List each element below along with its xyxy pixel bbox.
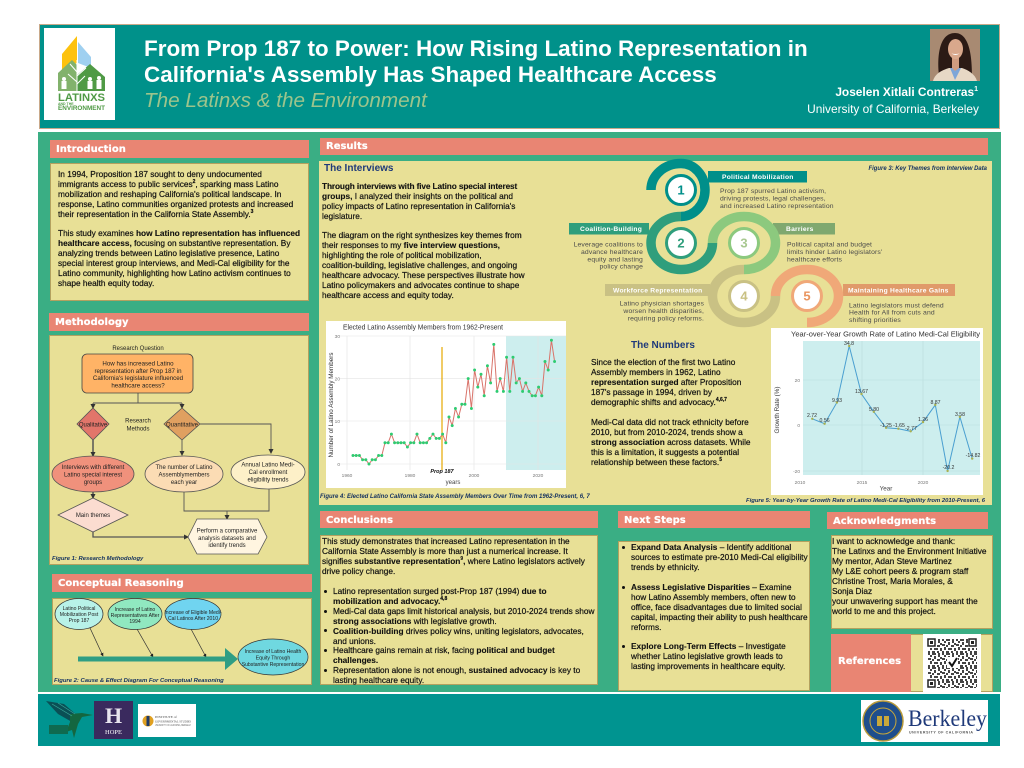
chart: elected Latino assembly members: Elected Latino Assembly Members from 1962-Present bbox=[343, 324, 503, 332]
conclusions bullets: mobilization and advocacy.4,8 bbox=[333, 596, 447, 606]
panel: methodology flowchart: Qualitative bbox=[79, 422, 108, 428]
banner: coalition-building: policy change bbox=[599, 264, 643, 270]
panel: cause and effect diagram: Increase of Eligible Medi- bbox=[164, 610, 222, 616]
Medi-Cal text bbox=[591, 417, 751, 467]
panel: cause and effect diagram: Substantive Representation bbox=[242, 662, 304, 668]
introduction text bbox=[58, 169, 293, 219]
chart: Medi-Cal eligibility growth: -14.82 bbox=[966, 453, 980, 459]
banner: coalition-building: advance healthcare bbox=[581, 249, 643, 256]
panel: methodology flowchart: Research bbox=[125, 418, 151, 424]
acknowledgments text: Sonja Diaz bbox=[832, 586, 872, 596]
banner: workforce representation: Workforce Representation bbox=[613, 288, 702, 294]
introduction study text: This study examines how Latino representation has influenced bbox=[58, 228, 300, 238]
panel: methodology flowchart: representation after Prop 187 in bbox=[94, 368, 182, 375]
interviews diagram description: The diagram on the right synthesizes key themes from bbox=[322, 230, 522, 240]
footer band bbox=[38, 694, 1000, 746]
Medi-Cal text: relationship between these factors.5 bbox=[591, 457, 722, 467]
chart: Medi-Cal eligibility growth: 2020 bbox=[918, 480, 929, 486]
banner: political mobilization: driving protests, legal challenges, bbox=[720, 196, 826, 202]
panel: methodology flowchart: each year bbox=[171, 480, 197, 486]
interviews text bbox=[322, 181, 518, 221]
panel: methodology flowchart: analysis datasets and bbox=[198, 536, 256, 542]
heading: Methodology: Methodology bbox=[55, 317, 129, 328]
acknowledgments text: My mentor, Adan Steve Martinez bbox=[832, 556, 952, 566]
main green background bbox=[38, 132, 1001, 692]
introduction study text: healthcare access, focusing on substantive representation. By bbox=[58, 238, 290, 248]
banner: coalition-building: Leverage coalitions to bbox=[574, 242, 643, 248]
panel: methodology flowchart: The number of Latino bbox=[155, 465, 213, 471]
heading: Conceptual Reasoning: Conceptual Reasoning bbox=[58, 578, 184, 589]
acknowledgments text: I want to acknowledge and thank: bbox=[832, 536, 955, 546]
introduction text: In 1994, Proposition 187 sought to deny undocumented bbox=[58, 169, 262, 179]
conclusions bullets: strong associations with legislative growth. bbox=[333, 616, 497, 626]
conclusions bullets: challenges. bbox=[333, 655, 378, 665]
heading: Next Steps: Next Steps bbox=[624, 515, 686, 526]
Medi-Cal text: this is a limitation, it suggests a potential bbox=[591, 447, 739, 457]
conclusions intro text: California State Assembly is more than just a numerical increase. It bbox=[322, 546, 568, 556]
panel: methodology flowchart: Interviews with different bbox=[62, 465, 125, 471]
logo: Institute of Governmental Studies: INSTITUTE of bbox=[155, 715, 178, 719]
icon: references QR code bbox=[923, 634, 981, 692]
interviews diagram description bbox=[322, 230, 525, 300]
conclusions bullets: lasting healthcare equity. bbox=[333, 675, 424, 685]
acknowledgments text: Christine Trost, Maria Morales, & bbox=[832, 576, 953, 586]
next steps bullets: office, face disadvantages due to limited social bbox=[631, 602, 802, 612]
introduction text: immigrants access to public services2, sparking mass Latino bbox=[58, 179, 278, 189]
introduction study text: special interest group interviews, and Medi-Cal eligibility for the bbox=[58, 258, 290, 268]
panel: methodology flowchart bbox=[49, 335, 309, 565]
panel: cause and effect diagram: Representatives After bbox=[111, 613, 160, 619]
logo: HOPE: H bbox=[105, 703, 122, 728]
chart: elected Latino assembly members bbox=[326, 321, 566, 488]
title: California's Assembly Has Shaped Healthcare Access bbox=[144, 62, 717, 87]
introduction study text: Latino community, highlighting how Latino activism continues to bbox=[58, 268, 291, 278]
numbered circles: 2 bbox=[677, 236, 685, 250]
interviews text: legislature. bbox=[322, 211, 362, 221]
banner: political mobilization bbox=[708, 171, 834, 210]
chart: Medi-Cal eligibility growth bbox=[771, 328, 983, 495]
panel: cause and effect diagram: Cal Latinos After 2010 bbox=[168, 616, 218, 622]
chart: elected Latino assembly members: Prop 187 bbox=[430, 469, 455, 475]
heading: Conceptual Reasoning bbox=[52, 574, 312, 592]
panel: methodology flowchart: Methods bbox=[126, 426, 150, 432]
panel: conclusions bbox=[320, 535, 598, 685]
next steps bullets: Explore Long-Term Effects – Investigate bbox=[631, 641, 786, 651]
title: From Prop 187 to Power: How Rising Latino Representation in bbox=[144, 36, 808, 61]
heading: Introduction bbox=[50, 140, 309, 158]
next steps bullets: lasting improvements in healthcare equity. bbox=[631, 661, 785, 671]
panel: introduction bbox=[50, 163, 309, 301]
numbers text: Since the election of the first two Latino bbox=[591, 357, 735, 367]
chart: Medi-Cal eligibility growth: -1.25 bbox=[880, 423, 892, 429]
banner: maintaining healthcare gains: shifting priorities bbox=[849, 317, 901, 324]
next steps bullets: Expand Data Analysis – Identify additional bbox=[631, 542, 791, 552]
chart: Medi-Cal eligibility growth: Year-over-Year Growth Rate of Latino Medi-Cal Eligibility bbox=[791, 330, 980, 338]
chart: Medi-Cal eligibility growth: 0 bbox=[797, 423, 800, 429]
interviews diagram description: Latino policymakers and advocates continue to shape bbox=[322, 280, 519, 290]
panel: cause and effect diagram: Increase of Latino bbox=[115, 607, 155, 613]
next steps bullets: trends by ethnicity. bbox=[631, 562, 700, 572]
chart: Medi-Cal eligibility growth: -1.65 bbox=[893, 423, 905, 429]
numbered circles: 4 bbox=[740, 288, 748, 304]
next steps bullets: sources to estimate pre-2010 Medi-Cal eligibility bbox=[631, 552, 808, 562]
logo: hummingbird bbox=[46, 701, 92, 738]
numbers text: Assembly members in 1962, Latino bbox=[591, 367, 721, 377]
Medi-Cal text: 2010, but from 2010-2024, trends show a bbox=[591, 427, 743, 437]
introduction text: their representation in the California State Assembly.3 bbox=[58, 209, 253, 219]
acknowledgments text: My L&E cohort peers & program staff bbox=[832, 566, 968, 576]
introduction text: response, Latino communities organized protests and increased bbox=[58, 199, 293, 209]
diagram: five key themes bbox=[569, 158, 955, 328]
numbered circles: 1 bbox=[677, 182, 685, 198]
conclusions bullets: Medi-Cal data gaps limit historical analysis, but 2010-2024 trends show bbox=[333, 606, 594, 616]
caption: figure 1: Figure 1: Research Methodology bbox=[52, 556, 143, 562]
header banner bbox=[39, 24, 1000, 129]
panel: methodology flowchart: Perform a comparative bbox=[197, 528, 258, 534]
banner: political mobilization: and increased Latino representation bbox=[720, 203, 834, 210]
chart: Medi-Cal eligibility growth: 5.80 bbox=[869, 407, 879, 413]
chart: elected Latino assembly members: 2020 bbox=[533, 473, 544, 479]
caption: figure 4: Figure 4: Elected Latino California State Assembly Members Over Time from 1962-Present, 6, 7 bbox=[320, 494, 590, 500]
logo: Institute of Governmental Studies bbox=[138, 704, 196, 737]
heading: Acknowledgments: Acknowledgments bbox=[833, 516, 936, 527]
banner: coalition-building bbox=[569, 223, 649, 270]
subtitle: The Latinxs & the Environment bbox=[144, 89, 427, 112]
heading: Introduction: Introduction bbox=[56, 144, 126, 155]
panel: methodology flowchart: healthcare access? bbox=[111, 382, 165, 390]
heading: Results bbox=[320, 138, 988, 155]
panel: next steps bbox=[618, 541, 810, 691]
conclusions bullets: and unions. bbox=[333, 636, 376, 646]
acknowledgments text: The Latinxs and the Environment Initiative bbox=[832, 546, 987, 556]
chart: elected Latino assembly members: years bbox=[446, 480, 460, 486]
chart: elected Latino assembly members: 0 bbox=[337, 462, 340, 468]
panel: methodology flowchart: eligibility trends bbox=[247, 478, 289, 484]
chart: Medi-Cal eligibility growth: -2.77 bbox=[905, 426, 917, 432]
banner: workforce representation: Latino physician shortages bbox=[620, 300, 704, 308]
next steps bullets: how Latino Assembly members, often new to bbox=[631, 592, 796, 602]
chart: Medi-Cal eligibility growth: 8.87 bbox=[930, 400, 941, 406]
interviews text: groups, I analyzed their insights on the political and bbox=[322, 191, 513, 201]
title bbox=[144, 36, 808, 87]
numbers text: 187's passage in 1994, driven by bbox=[591, 387, 712, 397]
next steps bullets: whether Latino legislative growth leads to bbox=[631, 651, 783, 661]
author photo bbox=[930, 29, 980, 81]
banner: political mobilization: Political Mobilization bbox=[722, 174, 794, 181]
panel: cause and effect diagram: Prop 187 bbox=[69, 618, 89, 624]
banner: barriers: Political capital and budget bbox=[787, 242, 872, 248]
subheading: The Interviews: The Interviews bbox=[324, 163, 393, 174]
references label bbox=[831, 634, 911, 692]
next steps bullets: reforms. bbox=[631, 622, 661, 632]
interviews diagram description: coalition-building, legislative challenges, and ongoing bbox=[322, 260, 517, 270]
spiral ribbons bbox=[651, 164, 838, 322]
banner: barriers: healthcare efforts bbox=[787, 256, 843, 264]
next steps bullets: Assess Legislative Disparities – Examine bbox=[631, 582, 792, 592]
panel: cause and effect diagram bbox=[52, 598, 312, 685]
panel: methodology flowchart: Cal enrollment bbox=[249, 470, 288, 476]
chart: elected Latino assembly members: Number of Latino Assembly Members bbox=[328, 352, 335, 458]
conclusions intro text: signifies substantive representation9, where Latino legislators actively bbox=[322, 556, 585, 566]
chart: Medi-Cal eligibility growth: Growth Rate (%) bbox=[774, 387, 781, 433]
next steps bullets bbox=[622, 542, 808, 671]
heading: Acknowledgments bbox=[827, 512, 988, 529]
panel: methodology flowchart: identify trends bbox=[208, 543, 246, 549]
numbered circles bbox=[666, 176, 822, 310]
banner: workforce representation: requiring policy reforms. bbox=[628, 316, 704, 322]
panel: cause and effect diagram: 1994 bbox=[129, 619, 141, 625]
panel: references bbox=[831, 634, 993, 692]
chart: Medi-Cal eligibility growth: 2010 bbox=[795, 480, 806, 486]
chart: elected Latino assembly members: 2000 bbox=[469, 473, 480, 479]
conclusions bullets: Coalition-building drives policy wins, uniting legislators, advocates, bbox=[333, 626, 584, 636]
banner: barriers: limits hinder Latino legislators' bbox=[787, 249, 882, 256]
chart: Medi-Cal eligibility growth: 0.56 bbox=[820, 418, 830, 424]
chart: Medi-Cal eligibility growth: -20 bbox=[793, 469, 800, 475]
conclusions bullets: Healthcare gains remain at risk, facing political and budget bbox=[333, 645, 555, 655]
acknowledgments text bbox=[832, 536, 987, 616]
banner: maintaining healthcare gains: Latino legislators must defend bbox=[849, 302, 944, 310]
numbers text: demographic shifts and advocacy.4,6,7 bbox=[591, 397, 727, 407]
logo: UC Berkeley: UNIVERSITY OF CALIFORNIA bbox=[909, 730, 973, 734]
introduction study text: analyzing trends between Latino legislative presence, Latino bbox=[58, 248, 279, 258]
introduction study text bbox=[58, 228, 300, 288]
panel: methodology flowchart: Assemblymembers bbox=[158, 472, 210, 478]
references label: References bbox=[838, 656, 901, 667]
chart: elected Latino assembly members: 1960 bbox=[342, 473, 353, 479]
chart: elected Latino assembly members: 30 bbox=[335, 334, 340, 340]
panel: acknowledgments bbox=[831, 535, 993, 629]
chart: Medi-Cal eligibility growth: 34.8 bbox=[844, 341, 854, 347]
panel: methodology flowchart: Latino special interest bbox=[64, 472, 122, 478]
banner: barriers: Barriers bbox=[786, 226, 814, 233]
numbered circles: 3 bbox=[740, 236, 748, 250]
interviews diagram description: their responses to my five interview questions, bbox=[322, 240, 500, 250]
panel: methodology flowchart: Quantitative bbox=[166, 422, 199, 428]
panel: methodology flowchart: How has increased Latino bbox=[102, 360, 174, 368]
banner: maintaining healthcare gains: Maintaining Healthcare Gains bbox=[848, 288, 949, 294]
heading: Conclusions bbox=[320, 511, 598, 528]
conclusions intro text: This study demonstrates that increased Latino representation in the bbox=[322, 536, 570, 546]
interviews text: Through interviews with five Latino special interest bbox=[322, 181, 517, 191]
chart: Medi-Cal eligibility growth: 20 bbox=[795, 378, 800, 384]
banner: coalition-building: Coalition-Building bbox=[580, 226, 642, 233]
acknowledgments text: your unwavering support has meant the bbox=[832, 596, 978, 606]
chart: Medi-Cal eligibility growth: 3.58 bbox=[955, 412, 965, 418]
chart: Medi-Cal eligibility growth: -20.2 bbox=[943, 465, 955, 471]
banner: political mobilization: Prop 187 spurred Latino activism, bbox=[720, 188, 826, 195]
logo: Latinxs and the Environment: AND THE bbox=[58, 102, 74, 106]
chart: Medi-Cal eligibility growth: 2.72 bbox=[807, 413, 817, 419]
next steps bullets: capital, impacting their ability to push healthcare bbox=[631, 612, 808, 622]
subheading: The Numbers: The Numbers bbox=[631, 340, 695, 351]
caption: figure 2: Figure 2: Cause & Effect Diagram For Conceptual Reasoning bbox=[54, 678, 224, 684]
panel: cause and effect diagram: Latino Political bbox=[63, 606, 95, 612]
conclusions intro text: drive policy change. bbox=[322, 566, 395, 576]
interviews diagram description: healthcare access and equity today. bbox=[322, 290, 454, 300]
panel: cause and effect diagram: Increase of Latino Health bbox=[245, 649, 301, 655]
logo: Latinxs and the Environment bbox=[44, 28, 115, 120]
logo: HOPE bbox=[94, 701, 133, 739]
conclusions intro text bbox=[322, 536, 585, 576]
banner: workforce representation bbox=[605, 284, 710, 322]
chart: Medi-Cal eligibility growth: 2015 bbox=[857, 480, 868, 486]
interviews diagram description: highlighting the role of political mobilization, bbox=[322, 250, 482, 260]
interviews text: policy impacts of Latino representation in California's bbox=[322, 201, 515, 211]
numbers text bbox=[590, 357, 741, 407]
chart: elected Latino assembly members: 1980 bbox=[405, 473, 416, 479]
Medi-Cal text: strong association across datasets. While bbox=[591, 437, 751, 447]
Medi-Cal text: Medi-Cal data did not track ethnicity before bbox=[591, 417, 749, 427]
panel: methodology flowchart: Annual Latino Medi- bbox=[241, 462, 295, 468]
acknowledgments text: world to me and this project. bbox=[832, 606, 936, 616]
panel: cause and effect diagram: Equity Through bbox=[256, 656, 290, 662]
interviews diagram description: healthcare advocacy. These perspectives illustrate how bbox=[322, 270, 525, 280]
chart: Medi-Cal eligibility growth: 9.93 bbox=[832, 398, 842, 404]
heading: Next Steps bbox=[618, 511, 810, 528]
conclusions bullets: Representation alone is not enough, sustained advocacy is key to bbox=[333, 665, 580, 675]
logo: Latinxs and the Environment: LATINXS bbox=[58, 92, 105, 104]
chart: Medi-Cal eligibility growth: Year bbox=[880, 486, 892, 492]
chart: elected Latino assembly members: 10 bbox=[335, 419, 340, 425]
logo: HOPE: HOPE bbox=[105, 729, 122, 736]
panel: methodology flowchart: groups bbox=[84, 480, 102, 486]
introduction text: mobilization and reshaping California's political landscape. In bbox=[58, 189, 281, 199]
chart: Medi-Cal eligibility growth: 13.67 bbox=[855, 389, 868, 395]
introduction study text: shape health equity today. bbox=[58, 278, 154, 288]
banner: barriers bbox=[773, 223, 882, 264]
panel: methodology flowchart: California's legislature influenced bbox=[93, 375, 184, 382]
affiliation: University of California, Berkeley bbox=[807, 102, 979, 116]
heading: Conclusions: Conclusions bbox=[326, 515, 393, 526]
panel: results bbox=[319, 161, 992, 505]
caption: figure 3: Figure 3: Key Themes from Interview Data bbox=[869, 166, 987, 172]
numbered circles: 5 bbox=[803, 288, 811, 304]
conclusions bullets: Latino representation surged post-Prop 187 (1994) due to bbox=[333, 586, 547, 596]
logo: UC Berkeley bbox=[861, 700, 988, 742]
logo: Latinxs and the Environment: ENVIRONMENT bbox=[58, 106, 105, 112]
banner: maintaining healthcare gains: Health for All from cuts and bbox=[849, 310, 935, 316]
chart: elected Latino assembly members: 20 bbox=[335, 376, 340, 382]
numbers text: representation surged after Proposition bbox=[591, 377, 741, 387]
heading: Results: Results bbox=[326, 141, 368, 152]
panel: cause and effect diagram: Mobilization Post bbox=[60, 612, 99, 618]
banner: workforce representation: worsen health disparities, bbox=[622, 308, 704, 315]
panel: methodology flowchart: Research Question bbox=[112, 346, 164, 352]
panel: methodology flowchart: Main themes bbox=[76, 513, 110, 519]
author name: Joselen Xitlali Contreras1 bbox=[835, 85, 978, 99]
banner: maintaining healthcare gains bbox=[843, 284, 955, 324]
chart: Medi-Cal eligibility growth: 1.26 bbox=[918, 417, 928, 423]
conclusions bullets bbox=[324, 586, 595, 685]
banner: coalition-building: equity and lasting bbox=[587, 256, 643, 264]
caption: figure 5: Figure 5: Year-by-Year Growth Rate of Latino Medi-Cal Eligibility from 2010-Present, 6 bbox=[746, 498, 985, 504]
heading: Methodology bbox=[49, 313, 309, 331]
